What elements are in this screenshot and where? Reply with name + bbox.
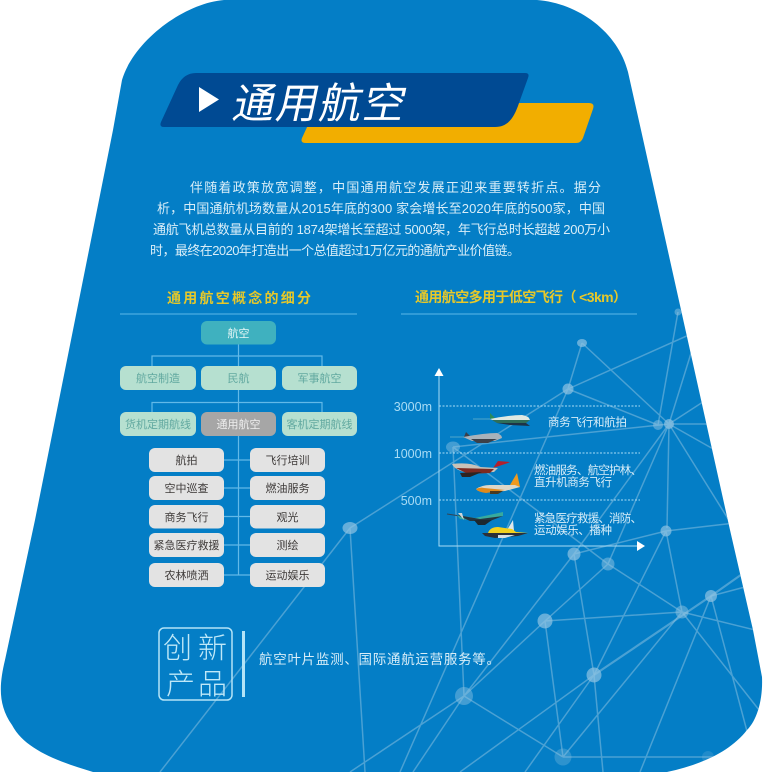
list: general aviation uses: 观光 xyxy=(276,510,298,524)
chart labels: 燃油服务、航空护林、 xyxy=(534,463,642,477)
row: second level: 军事航空 xyxy=(298,371,342,385)
list: general aviation uses: 紧急医疗救援 xyxy=(154,538,220,552)
chart labels xyxy=(534,415,642,537)
row: third level: 通用航空 xyxy=(216,417,260,431)
title text: 通用航空 xyxy=(229,80,411,127)
list: general aviation uses: 燃油服务 xyxy=(266,481,310,495)
list: general aviation uses: 航拍 xyxy=(176,453,198,467)
network pattern background xyxy=(160,308,763,772)
list: general aviation uses: 商务飞行 xyxy=(164,510,208,524)
row: third level: 货机定期航线 xyxy=(125,417,191,431)
list: general aviation uses: 空中巡查 xyxy=(164,481,208,495)
panel: low altitude chart xyxy=(394,289,645,551)
list: general aviation uses xyxy=(149,448,325,587)
icon: yellow jet xyxy=(482,520,528,538)
icon: orange jet xyxy=(476,473,520,494)
row: third level xyxy=(120,412,357,436)
altitude chart axes: 3000m xyxy=(394,400,432,414)
list: general aviation uses: 飞行培训 xyxy=(266,453,310,467)
list: general aviation uses: 运动娱乐 xyxy=(266,568,310,582)
icon: grey jet xyxy=(450,432,502,443)
intro paragraph xyxy=(150,180,610,258)
divider bar xyxy=(242,631,245,697)
box: aviation root: 航空 xyxy=(228,326,250,340)
chart labels: 直升机商务飞行 xyxy=(534,475,612,489)
row: second level: 民航 xyxy=(228,371,250,385)
innovative products badge xyxy=(159,628,232,701)
heading: low altitude: 通用航空多用于低空飞行（ <3km） xyxy=(415,289,627,305)
innovative products badge: 品 xyxy=(198,669,227,701)
navy banner xyxy=(160,73,529,127)
intro paragraph: 时，最终在2020年打造出一个总值超过1万亿元的通航产业价值链。 xyxy=(150,243,520,258)
chart labels: 商务飞行和航拍 xyxy=(548,415,627,429)
heading: breakdown: 通用航空概念的细分 xyxy=(167,290,311,306)
row: second level: 航空制造 xyxy=(136,371,180,385)
chart labels: 紧急医疗救援、消防、 xyxy=(534,511,642,525)
icon: teal jet xyxy=(447,512,503,525)
altitude chart axes xyxy=(394,368,645,551)
innovative products badge: 新 xyxy=(198,632,227,665)
box: aviation root xyxy=(201,321,276,344)
panel: aviation breakdown xyxy=(120,290,357,587)
row: third level: 客机定期航线 xyxy=(286,417,352,431)
intro paragraph: 析，中国通航机场数量从2015年底的300 家会增长至2020年底的500家，中国 xyxy=(157,201,605,216)
icon: red-tail jet xyxy=(452,461,510,477)
title banner xyxy=(160,73,593,143)
icon: white-green jet xyxy=(473,413,530,426)
list: general aviation uses: 农林喷洒 xyxy=(164,568,208,582)
altitude chart axes: 500m xyxy=(401,494,432,508)
innovative products section xyxy=(159,628,500,701)
innovative products text: 航空叶片监测、国际通航运营服务等。 xyxy=(259,651,500,667)
innovative products badge: 产 xyxy=(166,668,195,701)
org chart boxes xyxy=(120,321,357,587)
icon: play triangle xyxy=(199,87,219,112)
altitude chart axes: 1000m xyxy=(394,447,432,461)
list: general aviation uses: 测绘 xyxy=(276,538,298,552)
yellow banner stripe xyxy=(302,103,594,143)
intro paragraph: 通航飞机总数量从目前的 1874架增长至超过 5000架，年飞行总时长超越 200万小 xyxy=(153,222,610,237)
intro paragraph: 伴随着政策放宽调整，中国通用航空发展正迎来重要转折点。据分 xyxy=(190,180,601,195)
innovative products badge: 创 xyxy=(163,633,192,665)
row: second level xyxy=(120,366,357,390)
chart labels: 运动娱乐、播种 xyxy=(534,523,612,537)
